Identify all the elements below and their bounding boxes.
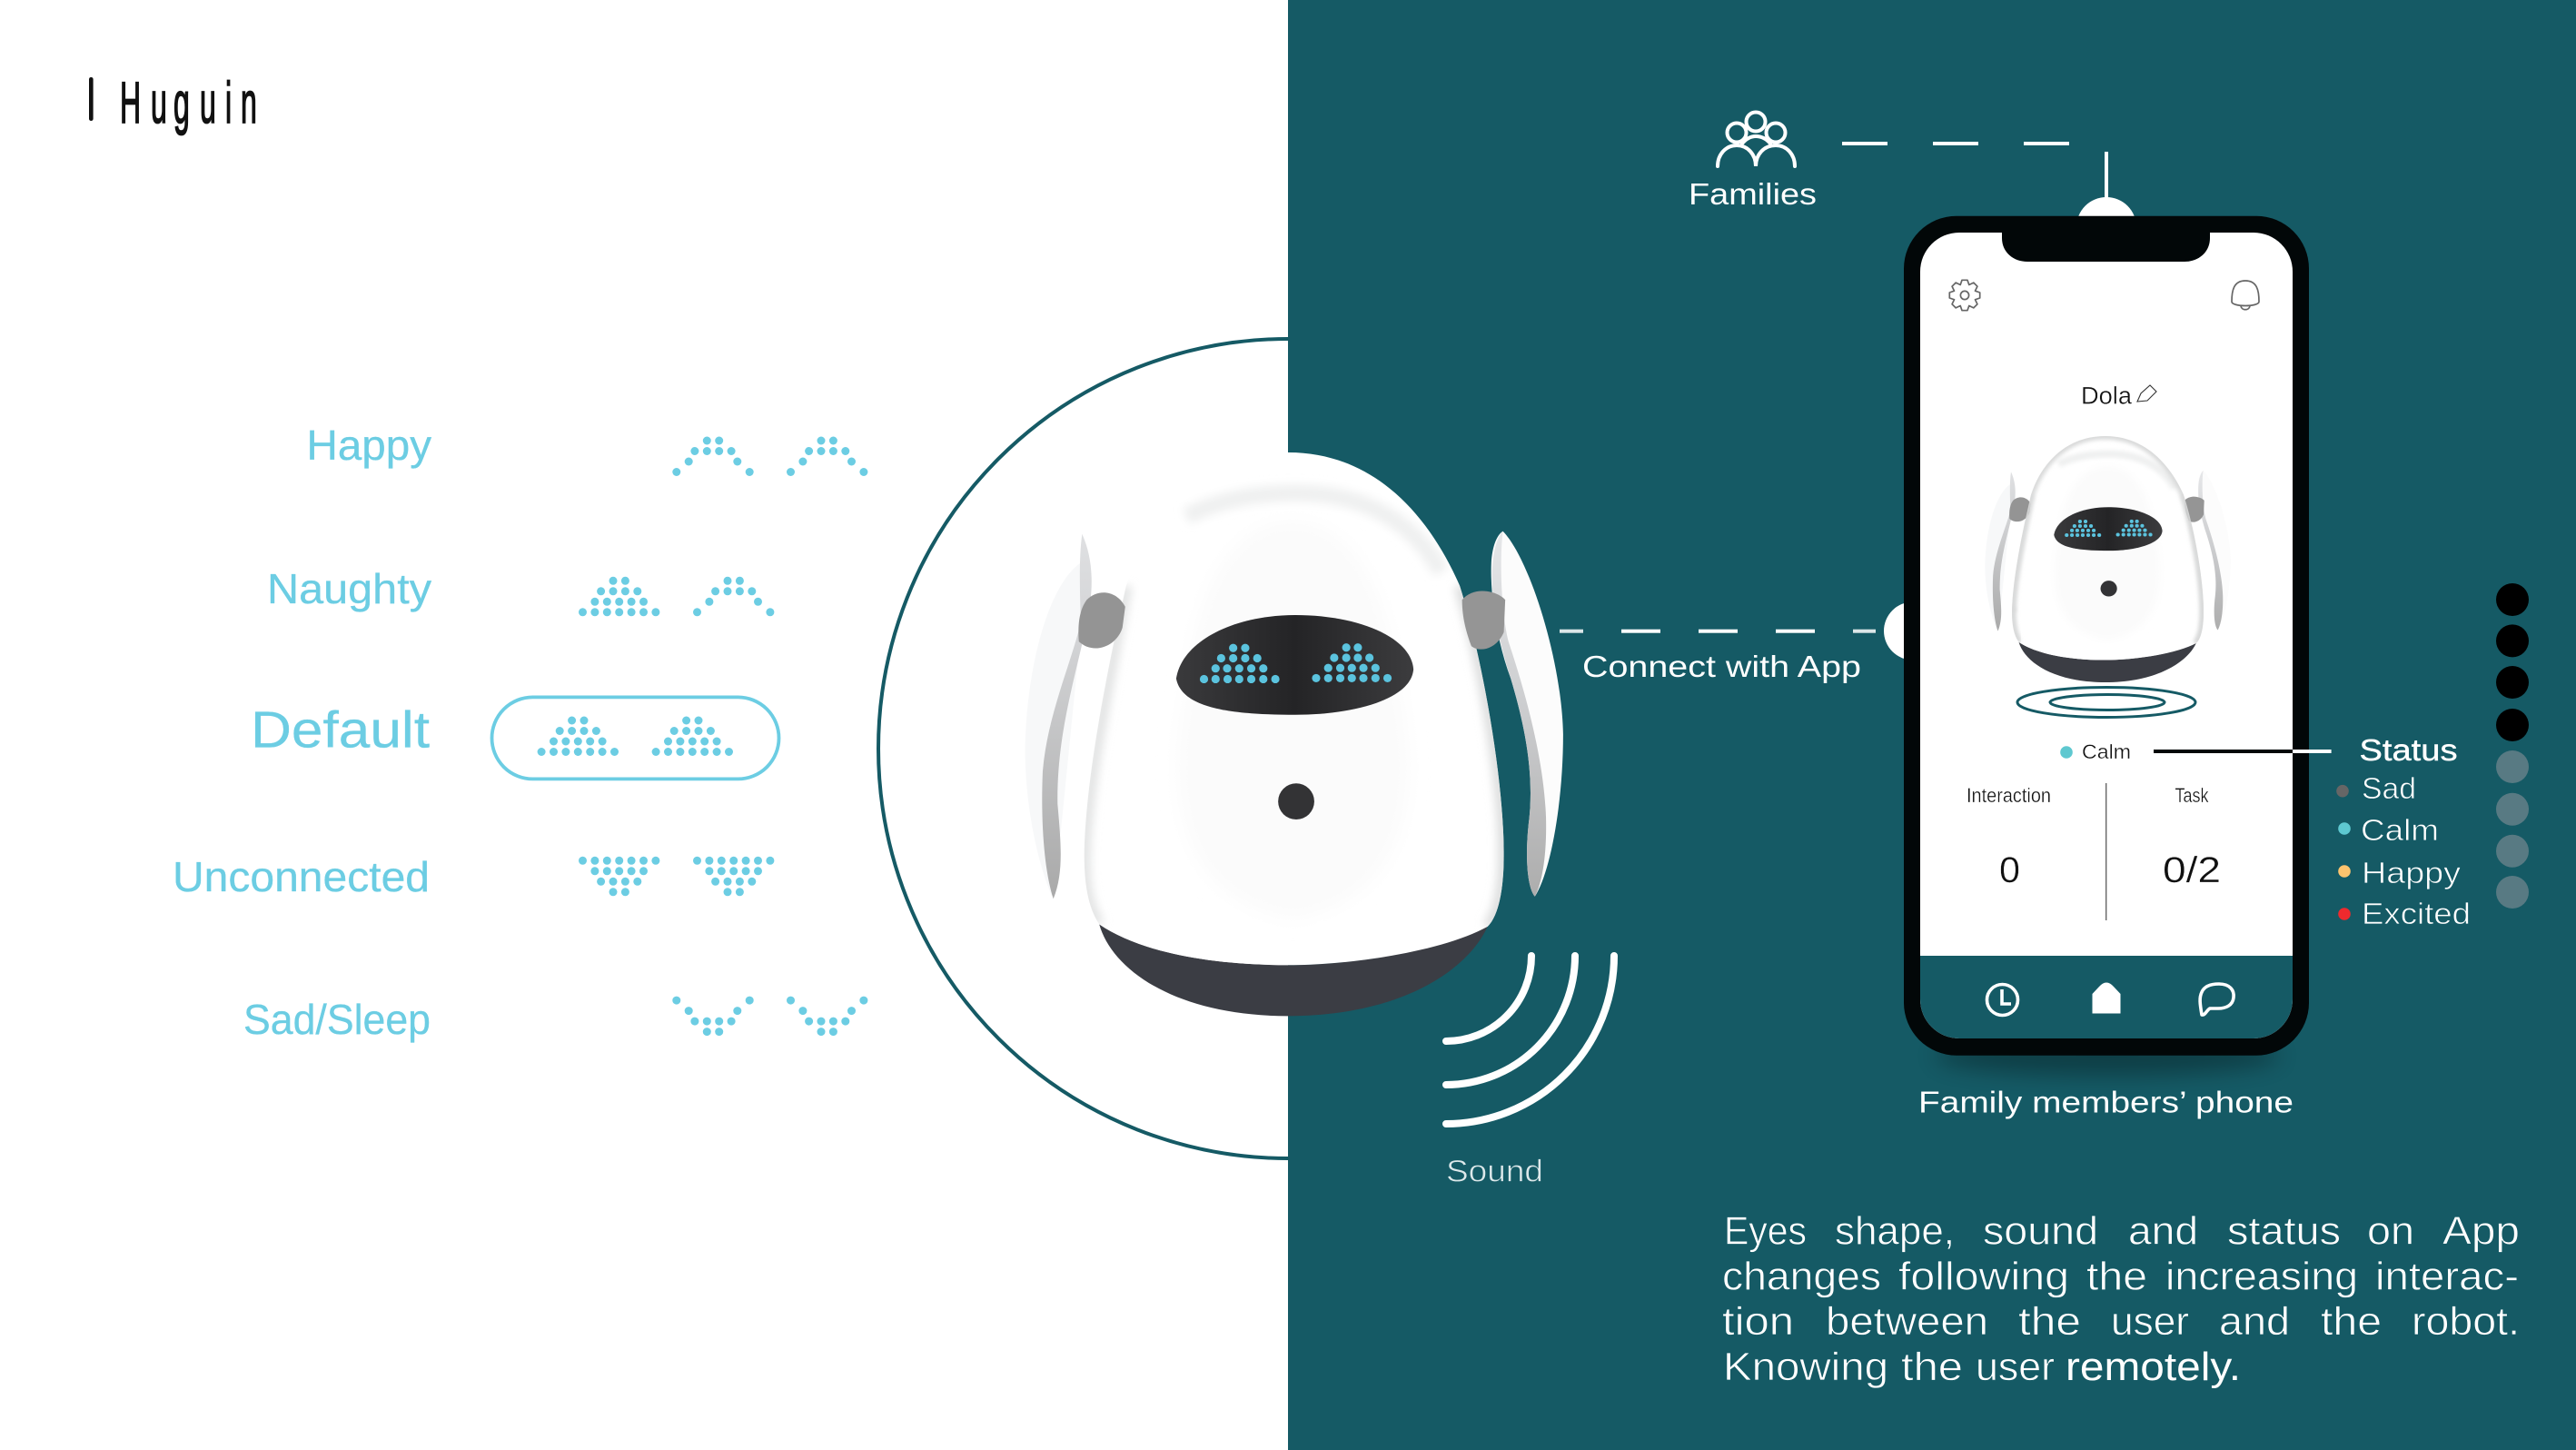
settings icon (1949, 280, 1980, 311)
description paragraph: Knowing (1723, 1345, 1888, 1389)
legend: calm (2338, 813, 2439, 847)
description paragraph: following (1898, 1254, 2069, 1299)
description paragraph: shape, (1835, 1208, 1955, 1253)
legend: calm: Calm (2361, 813, 2439, 847)
right wing (1491, 531, 1563, 897)
eyes: happy (672, 436, 867, 476)
sound label: Sound (1446, 1155, 1543, 1189)
phone shadow (1935, 1036, 2280, 1076)
description paragraph: and (2219, 1299, 2290, 1344)
left pivot (1078, 592, 1125, 648)
description paragraph: the (1901, 1345, 1963, 1389)
mini robot edge shading (2012, 436, 2204, 643)
description paragraph: remotely. (2066, 1345, 2241, 1389)
body (1085, 452, 1504, 1016)
families dashed connector (1842, 142, 2108, 199)
label: Naughty: Naughty (267, 565, 431, 612)
eyes: naughty (579, 577, 774, 616)
description paragraph: tion (1722, 1299, 1794, 1344)
phone caption: Family members’ phone (1918, 1085, 2294, 1119)
nose button (1278, 783, 1314, 819)
nav: home icon (2093, 983, 2120, 1014)
task value: 0/2 (2163, 850, 2221, 890)
description paragraph: changes (1722, 1254, 1881, 1299)
title: Huguin (120, 70, 257, 135)
nav: clock icon (1987, 985, 2018, 1016)
app connector circle left (1884, 601, 1942, 660)
floating rings (2017, 687, 2195, 718)
phone screen (1920, 233, 2293, 1038)
description paragraph: robot. (2412, 1299, 2520, 1344)
robot name: Dola (2081, 382, 2133, 410)
description paragraph: on (2367, 1208, 2414, 1253)
description paragraph: the (2086, 1254, 2147, 1299)
label: Unconnected: Unconnected (173, 853, 430, 900)
phone body (1904, 216, 2309, 1056)
right pivot (1462, 591, 1505, 650)
description paragraph: the (2018, 1299, 2081, 1344)
notch (2002, 227, 2210, 262)
description paragraph: between (1826, 1299, 1988, 1344)
interaction label: Interaction (1967, 784, 2051, 807)
status heading: Status (2360, 733, 2458, 767)
bell icon (2232, 281, 2259, 310)
phone (1904, 216, 2309, 1056)
interaction value: 0 (1999, 850, 2020, 890)
default highlight pill (492, 697, 779, 779)
eyes: default (538, 716, 733, 756)
pagination dots (2496, 583, 2529, 909)
families icon (1718, 113, 1795, 166)
connect label: Connect with App (1582, 650, 1861, 683)
eyes: unconnected (579, 857, 774, 896)
description paragraph: Eyes (1724, 1208, 1807, 1253)
description paragraph: increasing (2165, 1254, 2358, 1299)
description paragraph: and (2128, 1208, 2198, 1253)
robot eye dots (1200, 643, 1392, 683)
phone connector circle top (2076, 197, 2136, 257)
legend: sad (2336, 771, 2416, 805)
stats divider (2105, 783, 2106, 920)
half circle around robot (878, 339, 1288, 1158)
description paragraph: user (2111, 1299, 2189, 1344)
label: Sad/Sleep: Sad/Sleep (243, 996, 431, 1043)
description paragraph: interac- (2375, 1254, 2519, 1299)
eyes: sad/sleep (672, 997, 867, 1036)
status connector line (2154, 750, 2332, 753)
legend: sad: Sad (2362, 771, 2416, 805)
description paragraph: sound (1983, 1208, 2098, 1253)
connect dashed line (1560, 630, 1876, 633)
label: Happy: Happy (307, 422, 431, 469)
description paragraph (1722, 1208, 2520, 1389)
description paragraph: user (1976, 1345, 2055, 1389)
description paragraph: status (2227, 1208, 2341, 1253)
status text: Calm (2082, 740, 2131, 763)
description paragraph: the (2321, 1299, 2382, 1344)
nav: chat icon (2200, 984, 2234, 1015)
legend: happy: Happy (2362, 856, 2462, 889)
task label: Task (2175, 784, 2209, 807)
description paragraph: App (2442, 1208, 2520, 1253)
sound waves icon (1446, 956, 1614, 1124)
mini robot (1985, 436, 2231, 682)
legend: excited: Excited (2362, 897, 2471, 930)
bottom nav bar (1920, 956, 2293, 1038)
status dot (2060, 746, 2073, 759)
left wing (1025, 534, 1092, 899)
edit icon (2137, 385, 2156, 402)
robot (1025, 452, 1563, 1016)
families label: Families (1689, 177, 1817, 211)
face screen (1176, 615, 1413, 715)
label: Default: Default (251, 701, 430, 760)
panel: teal right background (1288, 0, 2576, 1450)
